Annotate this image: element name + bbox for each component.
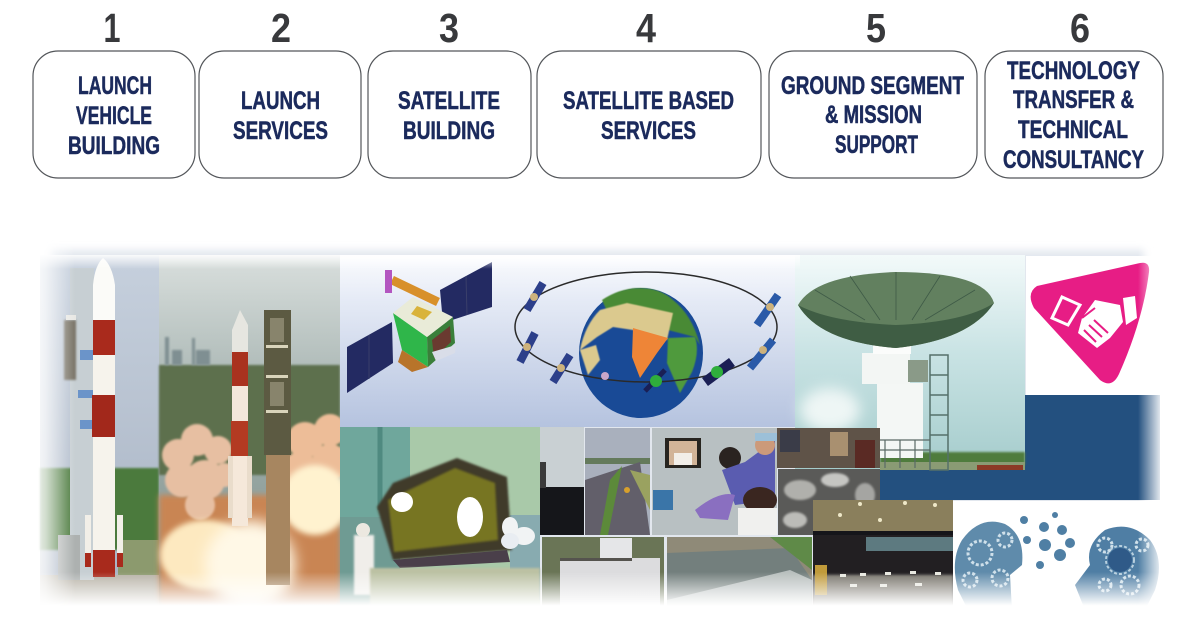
step 2: launch services: 2 xyxy=(271,5,291,51)
photo: satellite imagery xyxy=(778,469,880,535)
photo: rocket on launch pad xyxy=(40,255,159,610)
orbit xyxy=(515,272,777,382)
photo collage xyxy=(30,245,1172,622)
photo: camera xyxy=(540,427,584,535)
step 4: satellite based services: SERVICES xyxy=(601,117,696,145)
globe xyxy=(579,288,703,418)
step 1: launch vehicle building xyxy=(33,5,195,178)
icon: pink handshake badge xyxy=(1026,256,1160,395)
step 3: satellite building: 3 xyxy=(439,5,459,51)
step 2: launch services: SERVICES xyxy=(233,117,328,145)
step 3: satellite building xyxy=(368,5,531,178)
step 2: launch services: LAUNCH xyxy=(241,87,320,115)
step 6: technology transfer and technical consultancy: 6 xyxy=(1070,5,1090,51)
satellites on orbit xyxy=(520,283,778,391)
step 6: technology transfer and technical consultancy: TRANSFER & xyxy=(1013,86,1134,114)
step 6: technology transfer and technical consultancy xyxy=(985,5,1163,178)
photo: mission control room xyxy=(813,500,953,610)
step 5: ground segment and mission support: & MISSION xyxy=(825,101,922,129)
step 4: satellite based services: 4 xyxy=(636,5,656,51)
step 1: launch vehicle building: LAUNCH xyxy=(78,72,152,100)
step 4: satellite based services: SATELLITE BASED xyxy=(563,87,734,115)
photo: engineer working on satellite xyxy=(340,427,540,610)
photo: water channel xyxy=(667,537,812,610)
step 6: technology transfer and technical consultancy: TECHNICAL xyxy=(1018,116,1128,144)
step 1: launch vehicle building: VEHICLE xyxy=(76,102,152,130)
step 1: launch vehicle building: 1 xyxy=(104,5,120,51)
step 5: ground segment and mission support: GROUND SEGMENT xyxy=(781,72,964,100)
photo: outdoor van xyxy=(542,537,664,610)
photo: highway xyxy=(585,428,650,535)
step 2: launch services xyxy=(199,5,361,178)
image: satellite model xyxy=(340,255,501,427)
step 5: ground segment and mission support xyxy=(769,5,977,178)
edge fades xyxy=(30,245,1172,622)
photo: telemedicine xyxy=(652,428,777,535)
step 3: satellite building: SATELLITE xyxy=(398,87,500,115)
block: navy background xyxy=(880,395,1160,500)
step 5: ground segment and mission support: 5 xyxy=(866,5,886,51)
photo: rocket lift-off xyxy=(159,255,349,610)
image: satellites orbiting Earth xyxy=(501,255,795,427)
step 5: ground segment and mission support: SUPPORT xyxy=(835,131,918,159)
step 1: launch vehicle building: BUILDING xyxy=(68,132,160,160)
smoke clouds xyxy=(162,424,237,520)
step 6: technology transfer and technical consultancy: TECHNOLOGY xyxy=(1007,57,1140,85)
photo: field visit xyxy=(777,428,880,468)
step 3: satellite building: BUILDING xyxy=(403,117,495,145)
image: two heads with gears xyxy=(953,501,1160,610)
photo: ground station antenna xyxy=(795,255,1025,470)
step 4: satellite based services xyxy=(537,5,761,178)
step headers row xyxy=(33,5,1163,178)
